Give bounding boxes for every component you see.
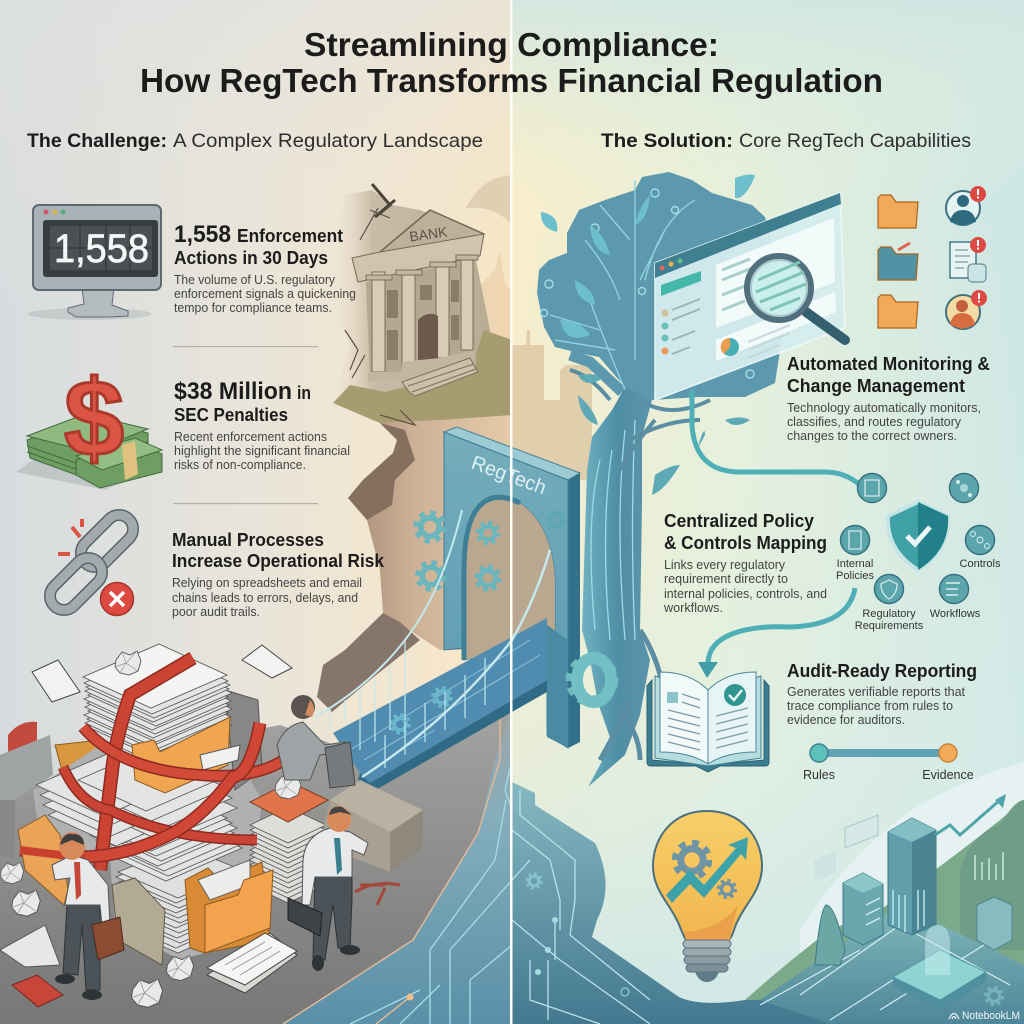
- lower paper stack: [116, 846, 244, 953]
- label: controls: Controls: [960, 558, 1001, 570]
- text block: manual processes: [172, 529, 385, 619]
- illustration: RegTech gate and bridge: [315, 427, 580, 792]
- illustration: cracked bank building: BANK: [408, 223, 449, 245]
- icon: dollar sign on money stacks: $: [64, 357, 124, 478]
- icon: dollar sign on money stacks: [16, 357, 162, 490]
- text block: SEC penalties: SEC Penalties: [174, 404, 288, 425]
- text block: audit-ready reporting: Audit-Ready Reporting: [787, 660, 977, 681]
- title: [140, 26, 883, 99]
- icon: workflows node: [940, 574, 968, 604]
- heading: the challenge: [27, 130, 483, 152]
- label: internal policies: Policies: [836, 570, 874, 582]
- text block: centralized policy: & Controls Mapping: [664, 532, 827, 553]
- text block: automated monitoring: changes to the correct owners.: [787, 428, 957, 443]
- grey folder behind stack: [225, 690, 262, 790]
- illustration: RegTech gate and bridge: RegTech: [468, 452, 549, 499]
- text block: audit-ready reporting: evidence for auditors.: [787, 712, 905, 727]
- illustration: left circuit floor: [283, 705, 512, 1024]
- text block: enforcement actions: Enforcement: [237, 225, 343, 246]
- text block: centralized policy: Centralized Policy: [664, 510, 815, 531]
- text block: audit-ready reporting: trace compliance from rules to: [787, 698, 953, 713]
- illustration: stressed worker left: [52, 832, 124, 1000]
- text block: SEC penalties: [174, 378, 350, 472]
- timeline: rules to evidence: [803, 744, 974, 782]
- icon: person with alert: [946, 186, 986, 225]
- illustration: crumbling ground cliff: [317, 190, 512, 712]
- icon: trend arrow line: [935, 794, 1006, 835]
- label: workflows: Workflows: [930, 608, 981, 620]
- icon: user with alert: [946, 290, 987, 329]
- label: evidence: Evidence: [922, 768, 974, 782]
- text block: automated monitoring: classifies, and routes regulatory: [787, 414, 961, 429]
- text block: enforcement actions: tempo for compliance teams.: [174, 300, 332, 315]
- icon: controls node top: [950, 474, 978, 502]
- text block: audit-ready reporting: [787, 660, 977, 727]
- illustration: future city on hill: [745, 762, 1024, 1024]
- heading: the solution: [601, 130, 971, 152]
- text block: enforcement actions: Actions in 30 Days: [174, 247, 328, 268]
- illustration: paper pile bound in red tape: [0, 644, 328, 1007]
- icon: regulatory requirements node: [874, 574, 904, 604]
- document stack on floor: [207, 933, 297, 993]
- text block: manual processes: Increase Operational Risk: [172, 550, 385, 571]
- icon: medium server: [843, 873, 883, 945]
- icon: small dashboard cards: [814, 815, 878, 882]
- icon: monitor showing 1,558: 1,558: [54, 227, 149, 271]
- floating paper right: [242, 645, 292, 678]
- label: regulatory requirements: Regulatory: [862, 608, 916, 620]
- illustration: dashboard window with magnifier: [655, 193, 845, 400]
- illustration: seated worker at desk: [277, 695, 423, 872]
- text block: manual processes: Manual Processes: [172, 529, 324, 550]
- diagram: policy mapping hub: [836, 474, 1001, 632]
- text block: centralized policy: Links every regulatory: [664, 557, 785, 572]
- text block: automated monitoring: [787, 353, 990, 443]
- crumpled paper balls: [0, 651, 301, 1007]
- icon: small server: [977, 897, 1012, 950]
- text block: audit-ready reporting: Generates verifiable reports that: [787, 684, 965, 699]
- illustration: big gear and roots: [571, 658, 613, 702]
- orange folder in stack: [132, 717, 230, 793]
- text block: manual processes: poor audit trails.: [172, 604, 260, 619]
- text block: enforcement actions: enforcement signals a quickening: [174, 286, 356, 301]
- icon: policies node top: [858, 474, 886, 502]
- heading: the solution: Core RegTech Capabilities: [739, 130, 971, 152]
- beige folder: [112, 878, 165, 965]
- text block: enforcement actions: The volume of U.S. regulatory: [174, 272, 335, 287]
- icon: orange folder: [878, 195, 918, 228]
- illustration: stressed worker right: [288, 806, 400, 971]
- illustration: grey floor: [0, 690, 512, 1024]
- icon: light bulb with gears and rising arrow: [653, 811, 762, 982]
- text block: SEC penalties: in: [297, 382, 311, 403]
- heading: the solution: The Solution:: [601, 130, 733, 152]
- left desk and chair: [0, 722, 53, 858]
- icon: open report book with check: [647, 672, 769, 772]
- text block: SEC penalties: Recent enforcement actions: [174, 429, 327, 444]
- icons: folders and alert badges: [878, 186, 987, 329]
- sheets on floor: [0, 925, 60, 967]
- loose sheet: [200, 745, 240, 770]
- text block: SEC penalties: highlight the significant financial: [174, 443, 350, 458]
- red tape ribbons: [20, 658, 287, 870]
- floating paper left: [32, 660, 80, 702]
- icon: teal folder: [878, 243, 918, 280]
- watermark: NotebookLM: [962, 1010, 1020, 1022]
- text block: automated monitoring: Technology automatically monitors,: [787, 400, 981, 415]
- text block: automated monitoring: Automated Monitoring &: [787, 353, 990, 374]
- label: regulatory requirements: Requirements: [855, 620, 924, 632]
- illustration: right circuit band and bottom: [512, 782, 1024, 1024]
- icon: document with alert: [950, 237, 986, 282]
- icon: orange folder two: [878, 295, 918, 328]
- text block: enforcement actions: [174, 221, 356, 315]
- icon: glowing chip platform: [893, 925, 986, 1010]
- text block: centralized policy: internal policies, controls, and: [664, 586, 827, 601]
- icon: monitor showing 1,558: [28, 205, 161, 320]
- text block: SEC penalties: $38 Million: [174, 378, 292, 405]
- heading: the challenge: A Complex Regulatory Landscape: [173, 130, 483, 152]
- title: How RegTech Transforms Financial Regulation: [140, 62, 883, 99]
- text block: manual processes: chains leads to errors, delays, and: [172, 590, 358, 605]
- illustration: circuit tree: [537, 172, 785, 787]
- icon: controls node: [966, 526, 994, 554]
- text block: centralized policy: [663, 510, 827, 615]
- left orange folder: [18, 815, 68, 905]
- title: Streamlining Compliance:: [304, 26, 719, 63]
- back folder: [55, 740, 120, 815]
- grey pile mass: [33, 745, 262, 960]
- text block: automated monitoring: Change Management: [787, 375, 965, 396]
- text block: centralized policy: requirement directly to: [664, 571, 788, 586]
- text block: SEC penalties: risks of non-compliance.: [174, 457, 306, 472]
- icon: shield: [888, 502, 948, 570]
- icon: internal policies node: [840, 526, 870, 554]
- text block: centralized policy: workflows.: [663, 600, 723, 615]
- arrow: monitoring to policy mapping: [692, 390, 860, 485]
- illustration: cracked bank building: [352, 184, 484, 396]
- heading: the challenge: The Challenge:: [27, 130, 167, 152]
- big orange folder: [185, 860, 273, 953]
- divider between challenge and solution: [510, 0, 512, 1024]
- icon: cone building: [815, 905, 845, 965]
- top paper stack: [83, 644, 232, 766]
- text block: enforcement actions: 1,558: [174, 221, 231, 248]
- arrow: policy mapping to report: [698, 588, 855, 678]
- icon: tall server tower: [888, 818, 936, 935]
- middle paper stack: [36, 747, 244, 881]
- text block: manual processes: Relying on spreadsheets and email: [172, 575, 362, 590]
- red book: [12, 975, 63, 1007]
- label: internal policies: Internal: [837, 558, 873, 570]
- right orange-topped stack: [249, 782, 328, 903]
- icon: broken chain link: [44, 509, 139, 616]
- label: rules: Rules: [803, 768, 835, 782]
